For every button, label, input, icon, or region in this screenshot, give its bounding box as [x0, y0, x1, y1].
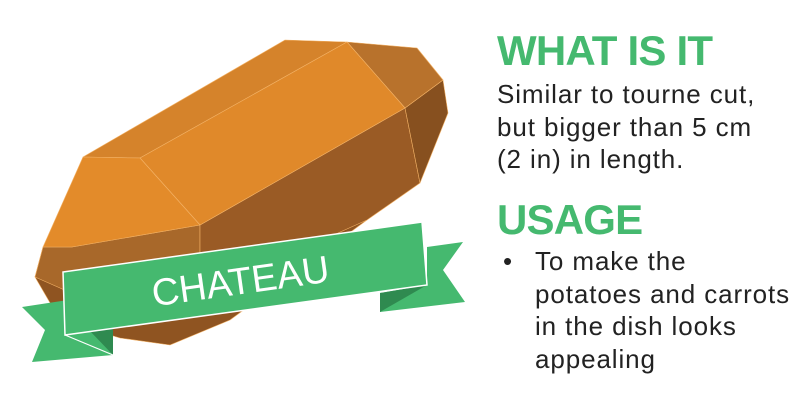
bullet list: usage: appealing	[535, 344, 656, 374]
ribbon label: CHATEAU	[149, 249, 332, 315]
text: description: but bigger than 5 cm	[497, 112, 752, 142]
heading: what is it: WHAT IS IT	[497, 27, 712, 74]
bullet list: usage: in the dish looks	[535, 311, 737, 341]
potato shape	[35, 40, 448, 345]
bullet list: usage: potatoes and carrots	[535, 278, 790, 308]
illustration: chateau potato with ribbon	[22, 40, 465, 362]
bullet list: usage: •	[503, 246, 513, 276]
text: description: Similar to tourne cut,	[497, 79, 755, 109]
text: description	[497, 79, 755, 174]
text: description: (2 in) in length.	[497, 144, 684, 174]
bullet list: usage: To make the	[535, 246, 687, 276]
heading: usage: USAGE	[497, 196, 642, 243]
ribbon	[22, 222, 465, 362]
bullet list: usage	[503, 246, 790, 374]
